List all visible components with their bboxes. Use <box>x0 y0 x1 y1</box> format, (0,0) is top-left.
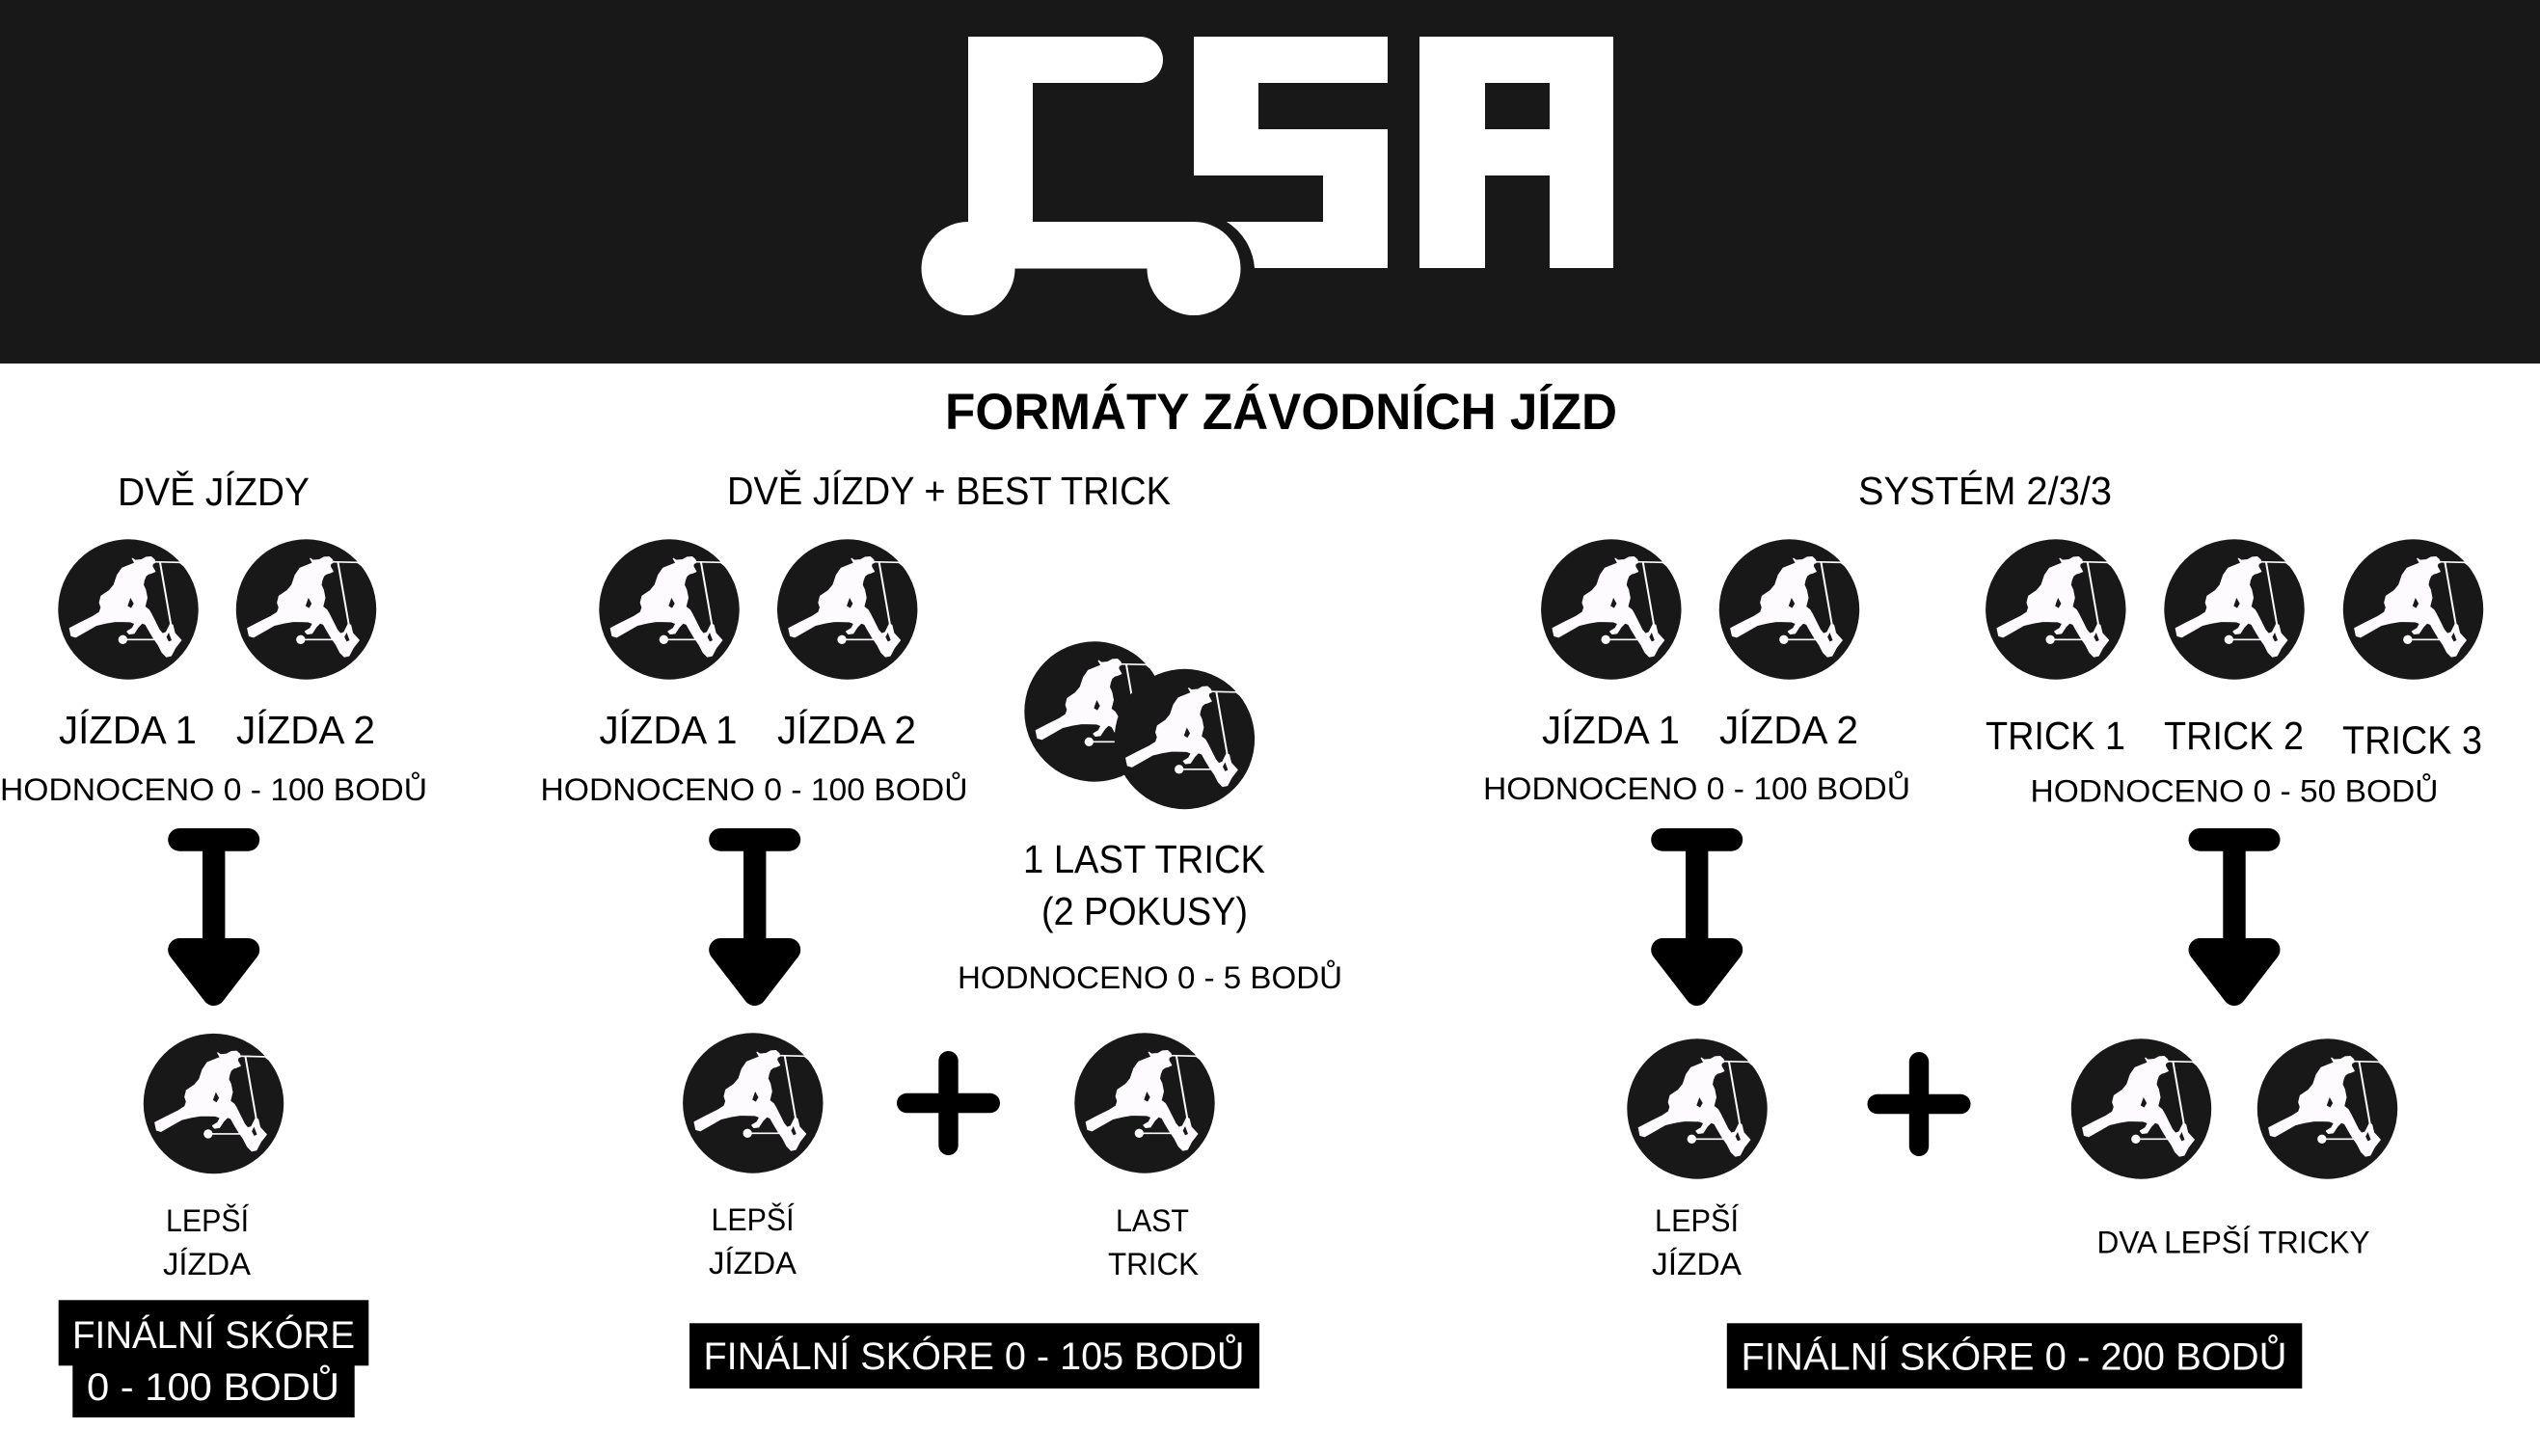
icon: lepší jízda <box>683 1033 824 1173</box>
icon: lepší trick 1 <box>2071 1038 2211 1179</box>
logo: CSA scooter wordmark <box>922 37 1613 315</box>
label: jízda 1: JÍZDA 1 <box>59 708 197 752</box>
label: lepší jízda: LEPŠÍ <box>712 1201 795 1237</box>
label: jízda 2: JÍZDA 2 <box>236 708 375 752</box>
label: jízda 1: JÍZDA 1 <box>1542 708 1680 752</box>
final score box: 0 - 100 BODŮ <box>87 1363 339 1409</box>
panel: dvě jízdy + best trick <box>540 469 1342 1389</box>
label: lepší jízda: JÍZDA <box>1652 1247 1742 1281</box>
arrow: tricks <box>2189 828 2280 994</box>
icon: two overlapping attempts <box>1024 641 1255 809</box>
icon: jízda 1 <box>1541 539 1682 680</box>
label: trick 1: TRICK 1 <box>1986 714 2125 758</box>
final score box: FINÁLNÍ SKÓRE 0 - 200 BODŮ <box>1742 1333 2287 1379</box>
heading: dvě jízdy: DVĚ JÍZDY <box>118 470 310 514</box>
label: jízda 2: JÍZDA 2 <box>1719 708 1858 752</box>
icon: lepší trick 2 <box>2257 1038 2397 1179</box>
label: last trick <box>1108 1203 1199 1281</box>
arrow <box>709 828 800 994</box>
label: trick 2: TRICK 2 <box>2164 714 2304 758</box>
icon: trick 3 <box>2343 539 2483 680</box>
panel: dvě jízdy <box>0 470 427 1417</box>
label: lepší jízda: JÍZDA <box>163 1247 251 1281</box>
final score box <box>689 1323 1259 1389</box>
plus <box>1867 1052 1971 1156</box>
scoring note: tricks: HODNOCENO 0 - 50 BODŮ <box>2031 771 2438 808</box>
arrow: rides <box>1651 828 1743 994</box>
icon: lepší jízda <box>144 1034 284 1173</box>
label: 1 last trick: 1 LAST TRICK <box>1023 837 1265 881</box>
final score box: FINÁLNÍ SKÓRE 0 - 105 BODŮ <box>704 1333 1244 1378</box>
icon: jízda 1 <box>58 539 199 680</box>
scoring note: rides: HODNOCENO 0 - 100 BODŮ <box>1483 769 1910 806</box>
label: 1 last trick <box>1023 837 1265 933</box>
icon: jízda 2 <box>1719 539 1859 680</box>
header band with logo <box>0 0 2540 364</box>
icon: jízda 1 <box>599 539 740 680</box>
icon: jízda 2 <box>236 539 376 680</box>
label: lepší jízda <box>1652 1202 1742 1281</box>
label: lepší jízda <box>163 1202 251 1281</box>
icon: lepší jízda <box>1627 1038 1768 1179</box>
scoring note: HODNOCENO 0 - 100 BODŮ <box>540 770 968 807</box>
icon: trick 1 <box>1986 539 2125 680</box>
icon: trick 2 <box>2164 539 2305 680</box>
final score box: FINÁLNÍ SKÓRE <box>72 1313 355 1357</box>
label: last trick: LAST <box>1116 1203 1189 1238</box>
plus <box>897 1051 1000 1155</box>
label: jízda 1: JÍZDA 1 <box>600 708 737 752</box>
label: 1 last trick: (2 POKUSY) <box>1041 889 1248 933</box>
label: dva lepší tricky: DVA LEPŠÍ TRICKY <box>2096 1225 2370 1259</box>
final score box <box>1727 1323 2302 1389</box>
label: lepší jízda: LEPŠÍ <box>1655 1202 1739 1238</box>
panel: systém 2/3/3 <box>1483 469 2483 1389</box>
title: FORMÁTY ZÁVODNÍCH JÍZD <box>945 383 1617 441</box>
label: jízda 2: JÍZDA 2 <box>777 708 916 752</box>
label: lepší jízda: LEPŠÍ <box>166 1202 249 1238</box>
icon: last trick <box>1074 1033 1215 1173</box>
arrow <box>168 828 259 994</box>
heading: dvě jízdy + best trick: DVĚ JÍZDY + BEST TRICK <box>727 469 1171 513</box>
scoring note: last trick: HODNOCENO 0 - 5 BODŮ <box>958 958 1342 995</box>
label: last trick: TRICK <box>1108 1247 1199 1281</box>
icon: jízda 2 <box>777 539 917 680</box>
heading: systém 2/3/3: SYSTÉM 2/3/3 <box>1858 469 2112 513</box>
label: trick 3: TRICK 3 <box>2342 717 2482 762</box>
label: lepší jízda <box>709 1201 797 1281</box>
scoring note: HODNOCENO 0 - 100 BODŮ <box>0 770 427 807</box>
final score box <box>59 1300 368 1417</box>
label: lepší jízda: JÍZDA <box>709 1246 797 1281</box>
